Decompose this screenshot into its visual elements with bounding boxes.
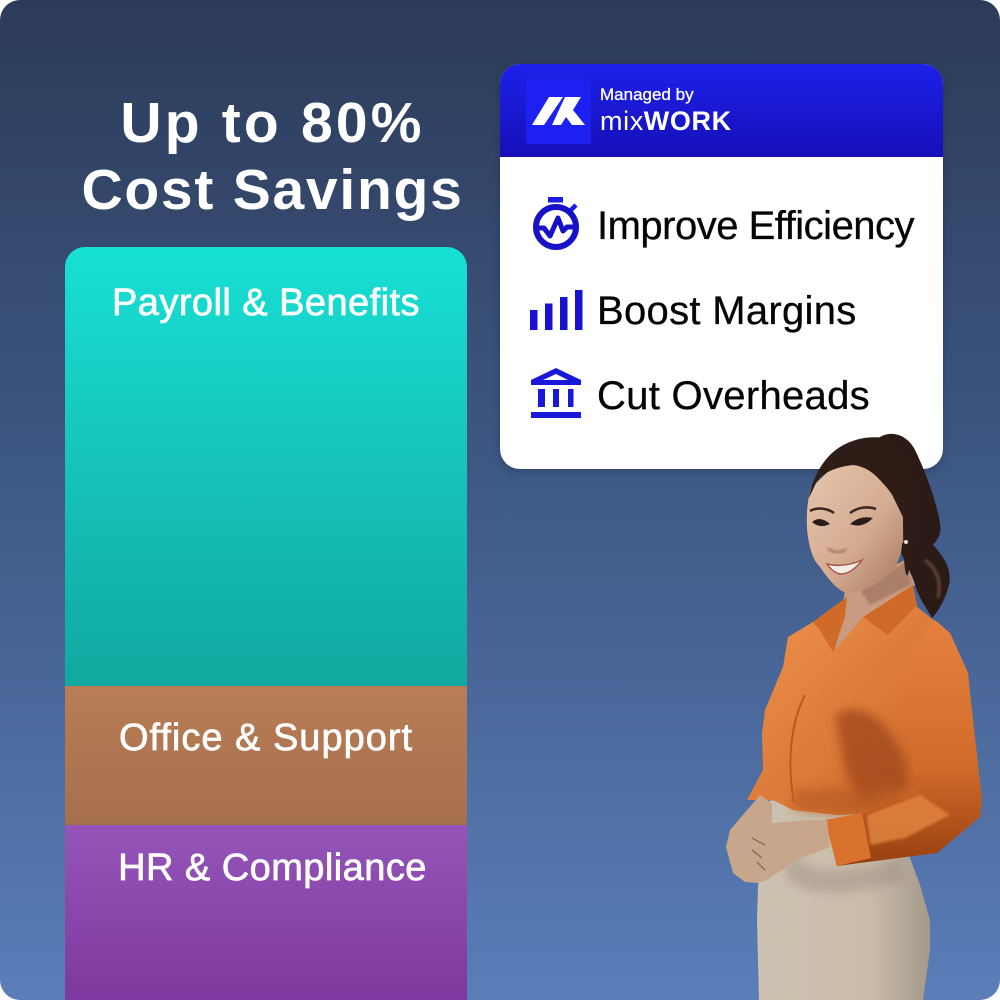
- hair: [809, 437, 916, 575]
- brand text: [600, 85, 732, 136]
- benefit: boost margins: Boost Margins: [597, 289, 857, 333]
- segment: payroll and benefits: Payroll & Benefits: [112, 282, 420, 324]
- segment: payroll and benefits: [65, 247, 467, 686]
- skirt shading: [785, 850, 905, 892]
- managed by label: Managed by: [600, 85, 694, 104]
- fingers: [752, 838, 765, 870]
- hands: [726, 795, 830, 883]
- sleeve fold: [867, 795, 950, 845]
- title: Up to 80%: [120, 91, 425, 155]
- logo: mixWORK: [526, 79, 591, 144]
- benefit: improve efficiency: Improve Efficiency: [597, 204, 914, 248]
- smile: [827, 560, 862, 574]
- segment: HR and compliance: [65, 825, 467, 1000]
- neck: [835, 560, 915, 652]
- icon: stopwatch: [533, 197, 579, 250]
- shirt shadow at waist: [793, 785, 900, 815]
- card: managed by mixWORK: [500, 64, 943, 469]
- head: [807, 460, 915, 593]
- eyes: [812, 517, 873, 526]
- shirt shading: [835, 709, 908, 803]
- cuff: [825, 813, 871, 866]
- collar: [813, 585, 917, 652]
- title: Cost Savings: [81, 158, 464, 222]
- title: [81, 91, 464, 222]
- neck shadow: [860, 562, 912, 605]
- shirt torso: [747, 585, 970, 815]
- ponytail: [880, 434, 950, 618]
- placket: [790, 695, 805, 802]
- brows: [810, 507, 876, 513]
- ponytail highlight: [925, 560, 939, 598]
- wordmark: mixWORK: [600, 106, 732, 136]
- earring: [904, 540, 908, 544]
- nose: [828, 548, 846, 552]
- segment: HR and compliance: HR & Compliance: [118, 847, 427, 889]
- benefit: cut overheads: Cut Overheads: [597, 374, 870, 418]
- sleeve: [825, 620, 982, 866]
- segment: office and support: Office & Support: [119, 717, 413, 759]
- segment: office and support: [65, 686, 467, 825]
- icon: bars: [530, 290, 582, 330]
- icon: bank: [531, 368, 581, 418]
- card header band: [500, 64, 943, 157]
- skirt: [757, 800, 930, 1000]
